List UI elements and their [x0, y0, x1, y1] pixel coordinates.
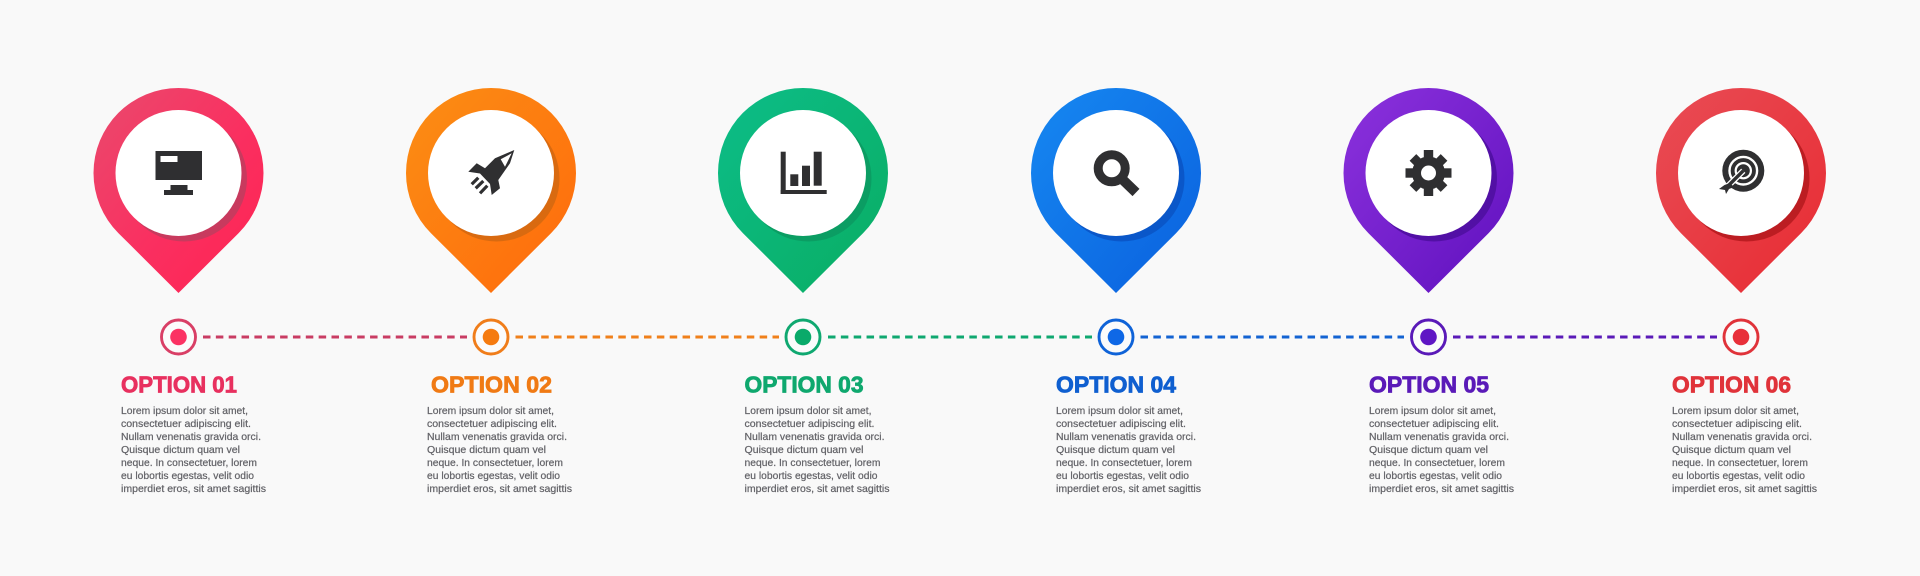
description: option 02: Quisque dictum quam vel: [427, 444, 546, 456]
heading: option 03: OPTION 03: [744, 372, 864, 398]
description: option 01: eu lobortis egestas, velit odio: [121, 470, 254, 482]
icon: rocket: [468, 150, 514, 195]
panel: option 04: [1031, 88, 1201, 495]
description: option 04: Quisque dictum quam vel: [1056, 444, 1175, 456]
description: option 01: [121, 405, 266, 495]
timeline marker: option 02: [474, 320, 508, 354]
timeline marker: option 03: [786, 320, 820, 354]
map pin: option 05: [1344, 88, 1514, 293]
description: option 01: imperdiet eros, sit amet sagittis: [121, 483, 266, 495]
description: option 06: [1672, 405, 1817, 495]
description: option 06: Nullam venenatis gravida orci.: [1672, 431, 1812, 443]
description: option 06: Quisque dictum quam vel: [1672, 444, 1791, 456]
description: option 03: Quisque dictum quam vel: [744, 444, 864, 456]
description: option 01: consectetuer adipiscing elit.: [121, 418, 251, 430]
description: option 04: [1056, 405, 1201, 495]
description: option 04: imperdiet eros, sit amet sagittis: [1056, 483, 1201, 495]
panel: option 03: [718, 88, 890, 495]
icon: desktop monitor: [156, 151, 202, 195]
timeline marker: option 04: [1099, 320, 1133, 354]
heading: option 05: OPTION 05: [1369, 372, 1489, 398]
description: option 06: neque. In consectetuer, lorem: [1672, 457, 1808, 469]
description: option 04: eu lobortis egestas, velit odio: [1056, 470, 1189, 482]
description: option 01: Lorem ipsum dolor sit amet,: [121, 405, 248, 417]
description: option 02: eu lobortis egestas, velit odio: [427, 470, 560, 482]
map pin: option 03: [718, 88, 888, 293]
panel: option 05: [1344, 88, 1514, 495]
heading: option 04: OPTION 04: [1056, 372, 1176, 398]
icon: magnifying glass: [1098, 155, 1136, 192]
description: option 05: consectetuer adipiscing elit.: [1369, 418, 1499, 430]
description: option 06: Lorem ipsum dolor sit amet,: [1672, 405, 1799, 417]
description: option 03: Nullam venenatis gravida orci.: [744, 431, 884, 443]
map pin: option 02: [406, 88, 576, 293]
description: option 05: neque. In consectetuer, lorem: [1369, 457, 1505, 469]
description: option 04: consectetuer adipiscing elit.: [1056, 418, 1186, 430]
description: option 05: Nullam venenatis gravida orci.: [1369, 431, 1509, 443]
description: option 03: [744, 405, 890, 495]
icon: gear: [1406, 150, 1452, 196]
description: option 01: neque. In consectetuer, lorem: [121, 457, 257, 469]
timeline marker: option 06: [1724, 320, 1758, 354]
description: option 02: neque. In consectetuer, lorem: [427, 457, 563, 469]
description: option 01: Nullam venenatis gravida orci.: [121, 431, 261, 443]
dashed timeline connectors: [203, 336, 1717, 338]
description: option 05: Quisque dictum quam vel: [1369, 444, 1488, 456]
description: option 03: eu lobortis egestas, velit odio: [744, 470, 878, 482]
timeline marker: option 05: [1412, 320, 1446, 354]
panel: option 01: [94, 88, 266, 495]
description: option 04: Nullam venenatis gravida orci.: [1056, 431, 1196, 443]
heading: option 02: OPTION 02: [431, 372, 552, 398]
description: option 04: neque. In consectetuer, lorem: [1056, 457, 1192, 469]
description: option 05: eu lobortis egestas, velit odio: [1369, 470, 1502, 482]
map pin: option 04: [1031, 88, 1201, 293]
description: option 06: eu lobortis egestas, velit odio: [1672, 470, 1805, 482]
description: option 01: Quisque dictum quam vel: [121, 444, 240, 456]
description: option 04: Lorem ipsum dolor sit amet,: [1056, 405, 1183, 417]
description: option 05: [1369, 405, 1514, 495]
icon: bar chart: [781, 152, 827, 194]
description: option 03: Lorem ipsum dolor sit amet,: [744, 405, 872, 417]
description: option 05: imperdiet eros, sit amet sagittis: [1369, 483, 1514, 495]
icon: target with arrow: [1719, 150, 1764, 194]
panel: option 06: [1656, 88, 1826, 495]
description: option 06: imperdiet eros, sit amet sagittis: [1672, 483, 1817, 495]
timeline marker: option 01: [162, 320, 196, 354]
heading: option 01: OPTION 01: [121, 372, 237, 398]
map pin: option 01: [94, 88, 264, 293]
description: option 02: [427, 405, 572, 495]
description: option 02: Lorem ipsum dolor sit amet,: [427, 405, 554, 417]
panel: option 02: [406, 88, 576, 495]
map pin: option 06: [1656, 88, 1826, 293]
description: option 03: neque. In consectetuer, lorem: [744, 457, 881, 469]
description: option 02: consectetuer adipiscing elit.: [427, 418, 557, 430]
heading: option 06: OPTION 06: [1672, 372, 1791, 398]
description: option 02: Nullam venenatis gravida orci.: [427, 431, 567, 443]
description: option 03: consectetuer adipiscing elit.: [744, 418, 874, 430]
description: option 03: imperdiet eros, sit amet sagittis: [744, 483, 890, 495]
description: option 02: imperdiet eros, sit amet sagittis: [427, 483, 572, 495]
description: option 05: Lorem ipsum dolor sit amet,: [1369, 405, 1496, 417]
description: option 06: consectetuer adipiscing elit.: [1672, 418, 1802, 430]
